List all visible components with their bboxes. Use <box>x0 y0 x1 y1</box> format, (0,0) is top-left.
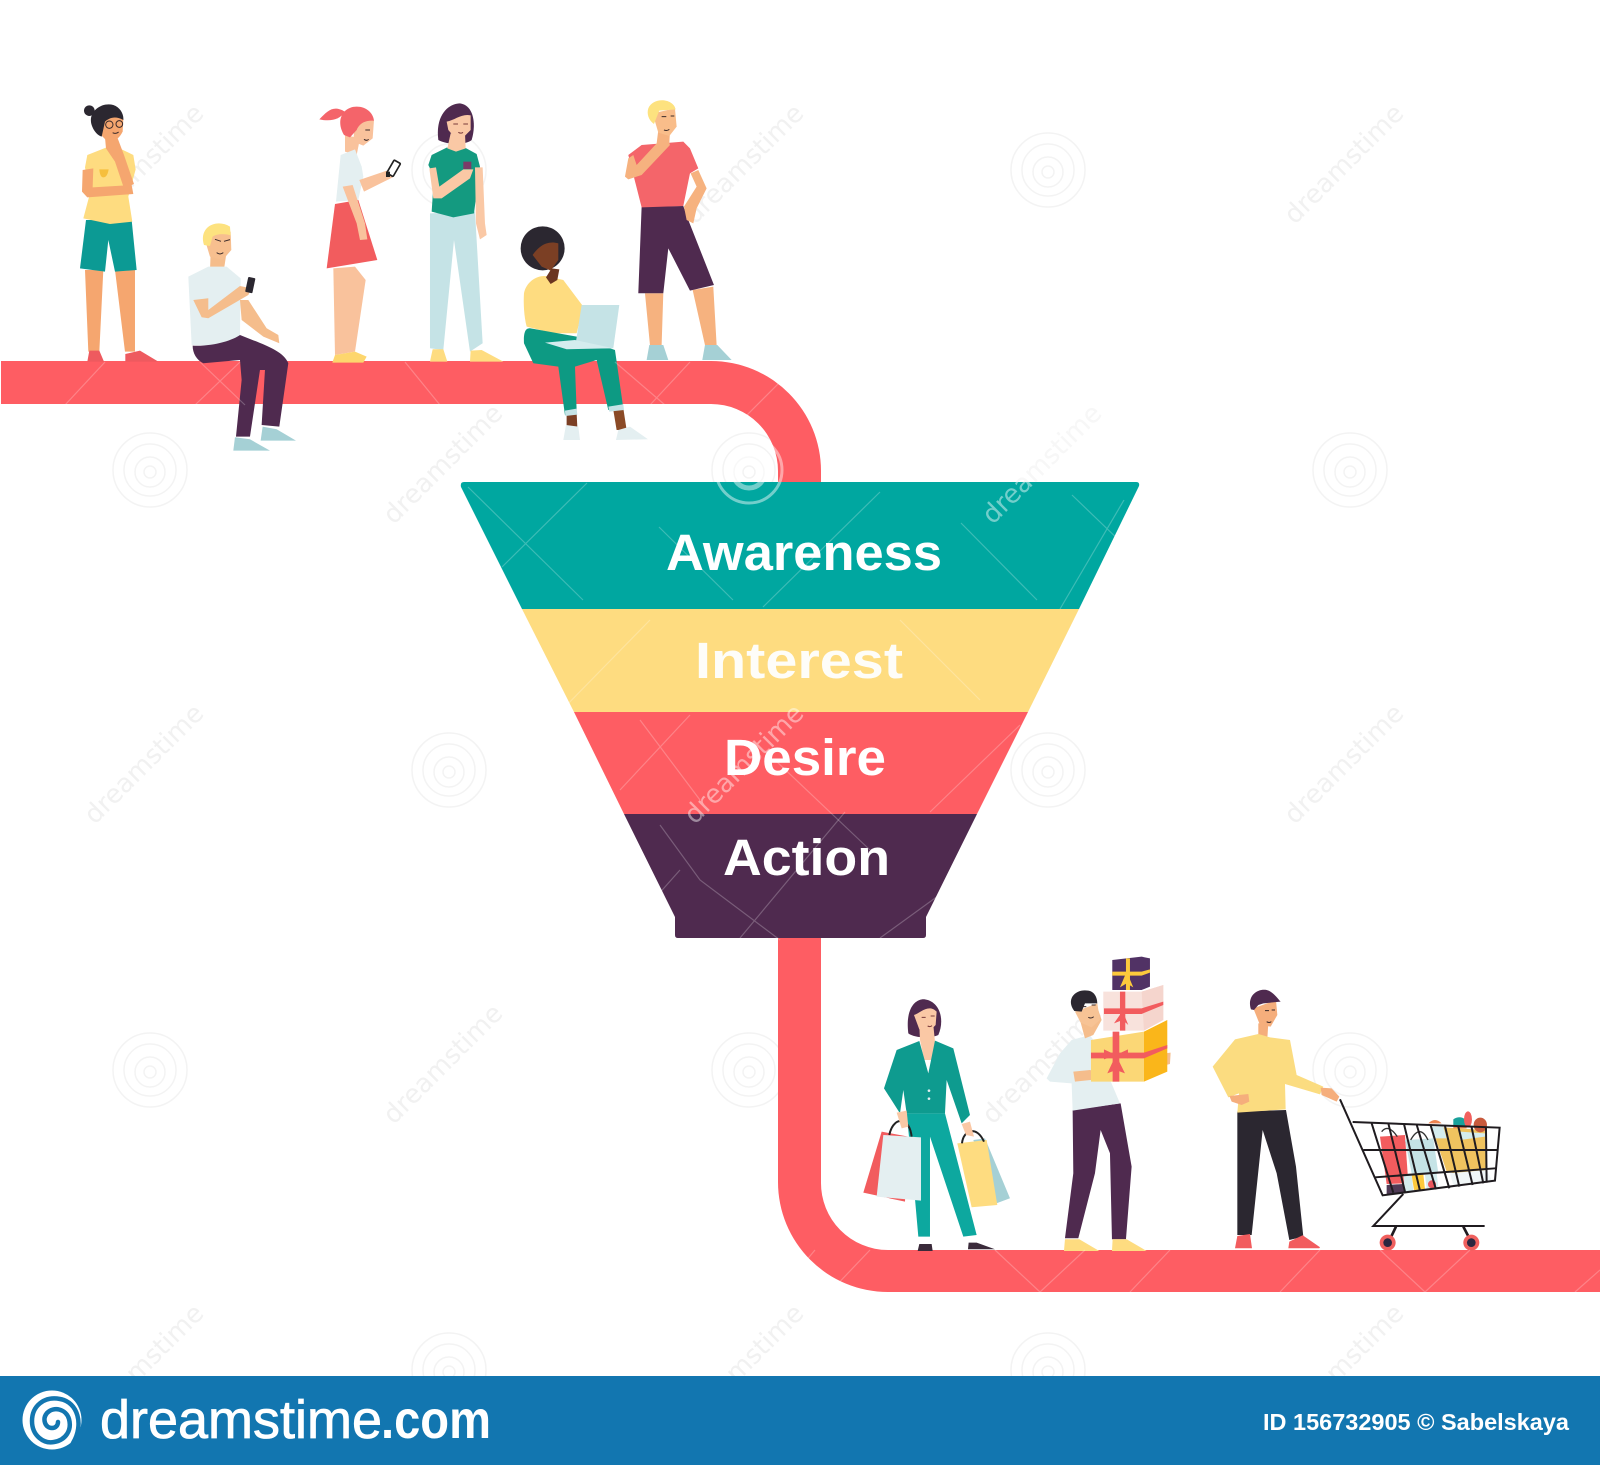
person: man in red shirt thinking <box>625 100 732 360</box>
watermark overlay lines on coloured shapes <box>65 362 1600 1292</box>
watermark layer on white background: dreamstime <box>378 399 509 530</box>
watermark layer on white background: dreamstime <box>79 699 210 830</box>
watermark layer on white background <box>79 99 1410 1430</box>
person: woman with glasses thinking <box>80 104 158 362</box>
watermark layer on white background: dreamstime <box>1279 99 1410 230</box>
watermark layer on white background: dreamstime <box>977 999 1108 1130</box>
cart frame <box>1340 1099 1500 1243</box>
watermark layer on white background: dreamstime <box>79 1299 210 1430</box>
pipe: upper section entering funnel <box>1 361 821 490</box>
watermark overlay marks on funnel <box>679 399 1108 830</box>
icon: dreamstime spiral logo <box>22 1390 82 1450</box>
watermark layer on white background: dreamstime <box>378 999 509 1130</box>
person: seated man with phone <box>188 223 296 451</box>
person: woman in teal suit with shopping bags <box>863 999 1010 1251</box>
watermark layer on white background: dreamstime <box>79 99 210 230</box>
label: Interest: Interest <box>695 632 903 689</box>
watermark layer on white background: dreamstime <box>679 1299 810 1430</box>
person: girl with ponytail and phone <box>319 107 401 363</box>
gift: purple box <box>1112 957 1150 990</box>
image id and credit: ID 156732905 © Sabelskaya <box>1263 1409 1569 1435</box>
person: woman with short dark hair <box>428 103 503 362</box>
shopping cart with bags and groceries <box>1340 1099 1500 1251</box>
funnel stage: awareness <box>461 482 1139 609</box>
gift: pink box <box>1103 985 1163 1031</box>
pipe: lower section leaving funnel <box>778 930 1600 1292</box>
funnel stage: interest <box>522 609 1079 712</box>
funnel stage: action <box>624 814 977 938</box>
person: man pushing cart <box>1213 990 1339 1248</box>
brand wordmark: dreamstime <box>100 1390 382 1450</box>
brand wordmark: .com <box>381 1390 491 1450</box>
watermark layer on white background: dreamstime <box>1279 699 1410 830</box>
label: Action: Action <box>723 829 890 886</box>
label: Desire: Desire <box>724 729 886 786</box>
gift: yellow box <box>1091 1020 1167 1082</box>
funnel stage: desire <box>574 712 1028 814</box>
watermark overlay marks on funnel: dreamstime <box>679 699 810 830</box>
label: Awareness: Awareness <box>666 524 942 581</box>
watermark overlay marks on funnel: dreamstime <box>977 399 1108 530</box>
watermark layer on white background: dreamstime <box>679 99 810 230</box>
footer bar <box>0 1376 1600 1465</box>
funnel <box>461 482 1139 938</box>
person: man carrying stacked gift boxes <box>1047 957 1171 1251</box>
watermark layer on white background: dreamstime <box>1279 1299 1410 1430</box>
watermark layer on white background: dreamstime <box>977 399 1108 530</box>
person: seated woman with laptop <box>521 226 648 440</box>
cart contents <box>1380 1111 1492 1194</box>
